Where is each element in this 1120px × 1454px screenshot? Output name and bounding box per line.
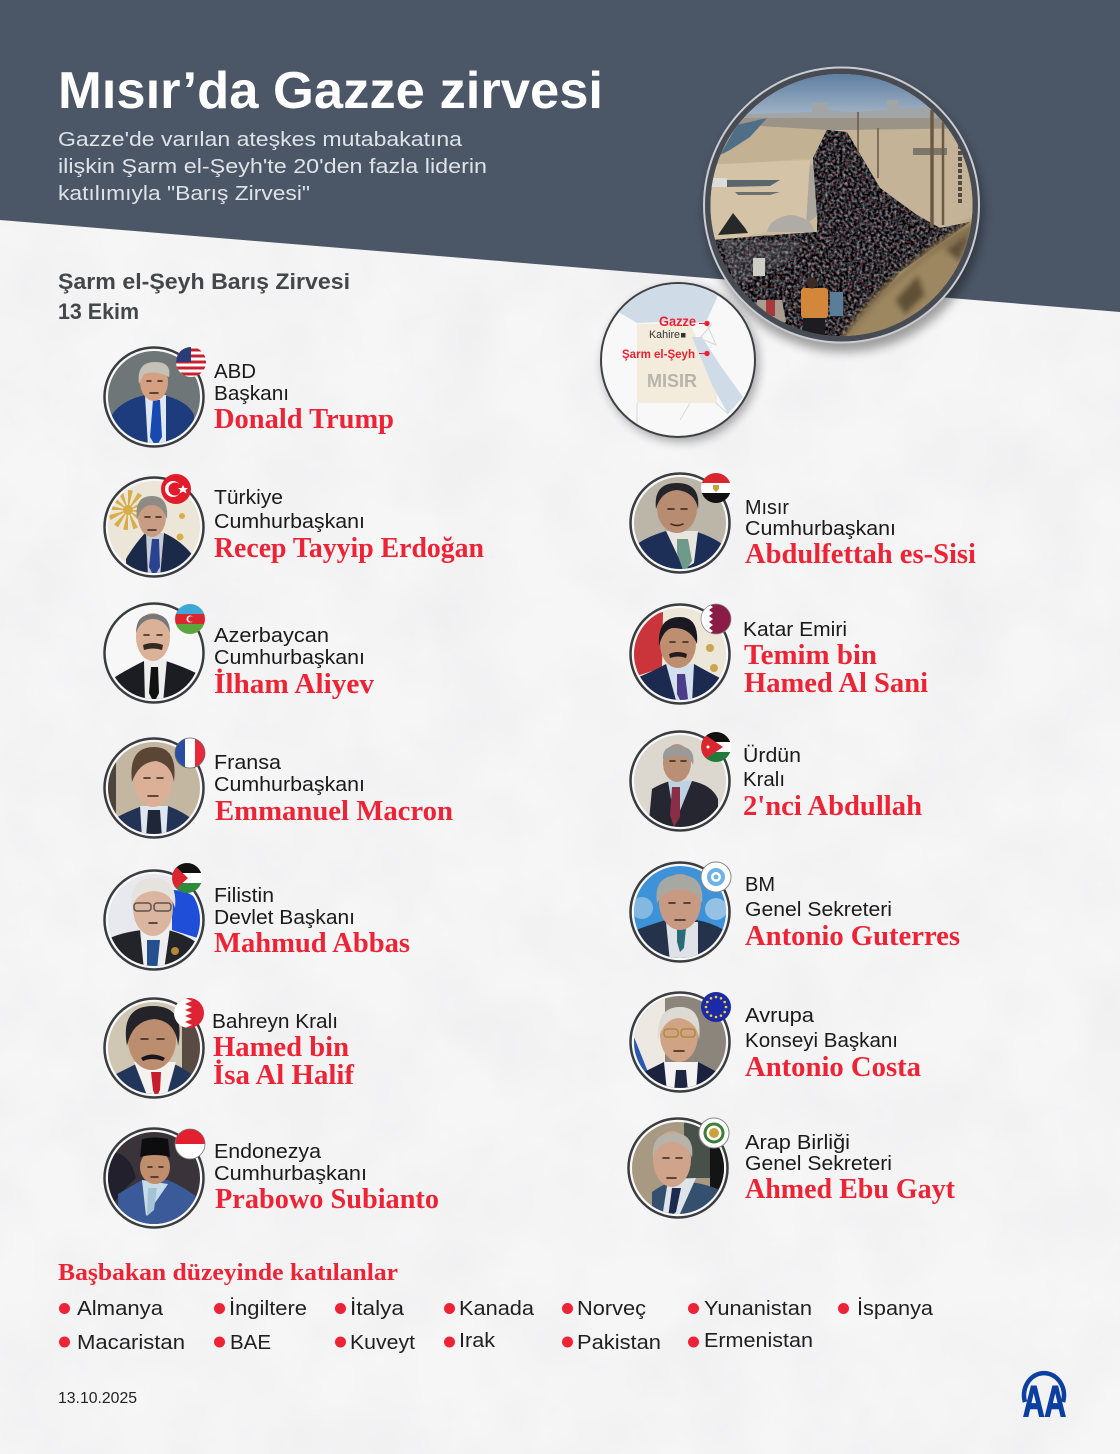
list of countries: Kuveyt: [350, 1332, 415, 1354]
label: Ahmed Ebu Gayt: [745, 1174, 956, 1205]
flag: European Union: [701, 992, 731, 1022]
label: Hamed bin: [213, 1032, 349, 1063]
label: Bahreyn Kralı: [212, 1011, 338, 1033]
portrait: [630, 862, 730, 962]
label: 2'nci Abdullah: [743, 791, 922, 822]
list of countries: İspanya: [857, 1297, 934, 1320]
date: 13.10.2025: [58, 1390, 137, 1407]
label: Arap Birliği: [745, 1132, 850, 1154]
flag: Jordan: [701, 732, 731, 762]
list of countries: İtalya: [350, 1297, 405, 1320]
list of countries: İngiltere: [229, 1297, 307, 1320]
flag: United Nations: [701, 862, 731, 892]
label: Mısır: [745, 497, 789, 519]
label: [743, 619, 928, 699]
leader: Prabowo Subianto: [104, 1128, 439, 1228]
section heading: 13 Ekim: [58, 299, 139, 324]
portrait: [104, 870, 204, 970]
subtitle: katılımıyla "Barış Zirvesi": [58, 183, 310, 205]
label: Hamed Al Sani: [744, 668, 928, 699]
map: Egypt locator: Şarm el-Şeyh: [622, 347, 695, 361]
leader: İlham Aliyev: [104, 603, 374, 703]
label: ABD: [214, 361, 256, 383]
map: Egypt locator: Kahire: [649, 329, 680, 341]
flag: Bahrain: [174, 998, 204, 1028]
list of countries: Pakistan: [577, 1332, 661, 1354]
label: Prabowo Subianto: [215, 1184, 439, 1215]
label: Cumhurbaşkanı: [214, 1163, 367, 1185]
list of countries: Almanya: [77, 1298, 164, 1320]
list of countries: [59, 1297, 934, 1354]
label: [743, 745, 922, 822]
portrait: [630, 604, 730, 704]
label: Cumhurbaşkanı: [214, 647, 365, 669]
portrait: [104, 998, 204, 1098]
label: Kralı: [743, 769, 785, 791]
label: Genel Sekreteri: [745, 899, 892, 921]
label: İlham Aliyev: [214, 669, 374, 700]
flag: Palestine: [172, 863, 202, 893]
leader: Mahmud Abbas: [104, 863, 410, 970]
label: [745, 497, 976, 570]
label: [214, 885, 410, 959]
leader: 2'nci Abdullah: [630, 731, 922, 831]
label: [745, 1132, 956, 1205]
list of countries: Irak: [459, 1330, 496, 1352]
label: Başkanı: [214, 383, 289, 405]
flag: Türkiye: [161, 474, 191, 504]
leader: Emmanuel Macron: [104, 738, 453, 838]
label: Filistin: [214, 885, 274, 907]
label: Fransa: [214, 752, 282, 774]
label: Cumhurbaşkanı: [214, 511, 365, 533]
leader: Antonio Guterres: [630, 862, 960, 962]
map: Egypt locator: [600, 282, 759, 442]
label: BM: [745, 874, 775, 896]
portrait: [104, 477, 204, 577]
label: [214, 752, 453, 827]
label: [214, 361, 394, 435]
label: [745, 1005, 921, 1083]
title: Mısır’da Gazze zirvesi: [58, 62, 603, 120]
flag: Arab League: [699, 1118, 729, 1148]
label: Recep Tayyip Erdoğan: [214, 533, 484, 564]
label: Azerbaycan: [214, 625, 329, 647]
list of countries: Macaristan: [77, 1332, 185, 1354]
leader: Donald Trump: [104, 347, 394, 447]
photo: crowd on coastal road: [700, 66, 990, 355]
leader: Hamed bin İsa Al Halife: [104, 998, 355, 1098]
flag: France: [175, 738, 205, 768]
label: Ürdün: [743, 745, 801, 767]
list of countries: Kanada: [459, 1298, 535, 1320]
heading: prime-minister level participants: Başbakan düzeyinde katılanlar: [58, 1260, 398, 1286]
label: Devlet Başkanı: [214, 907, 355, 929]
portrait: [630, 473, 730, 573]
leader: Antonio Costa: [630, 992, 921, 1092]
label: [212, 1011, 355, 1091]
label: İsa Al Halif: [213, 1060, 355, 1091]
label: [214, 625, 374, 700]
flag: USA: [176, 347, 206, 377]
portrait: [104, 347, 204, 447]
label: Cumhurbaşkanı: [745, 518, 896, 540]
label: Türkiye: [214, 487, 283, 509]
map: Egypt locator: MISIR: [647, 370, 697, 391]
subtitle: [58, 129, 487, 205]
subtitle: Gazze'de varılan ateşkes mutabakatına: [58, 129, 463, 151]
label: Temim bin: [744, 640, 877, 671]
leader: Abdulfettah es-Sisi: [630, 473, 976, 573]
subtitle: ilişkin Şarm el-Şeyh'te 20'den fazla liderin: [58, 156, 487, 178]
label: Abdulfettah es-Sisi: [745, 539, 976, 570]
list of countries: BAE: [230, 1332, 271, 1354]
section heading: [58, 269, 350, 324]
section heading: Şarm el-Şeyh Barış Zirvesi: [58, 269, 350, 294]
portrait: [104, 738, 204, 838]
label: Antonio Guterres: [745, 921, 960, 952]
label: Konseyi Başkanı: [745, 1030, 898, 1052]
label: Endonezya: [214, 1141, 322, 1163]
portrait: [104, 1128, 204, 1228]
label: Avrupa: [745, 1005, 815, 1027]
list of countries: Yunanistan: [704, 1298, 812, 1320]
label: Antonio Costa: [745, 1052, 921, 1083]
label: [745, 874, 960, 952]
flag: Qatar: [701, 604, 731, 634]
header band: [0, 0, 1120, 312]
label: Cumhurbaşkanı: [214, 774, 365, 796]
label: Genel Sekreteri: [745, 1153, 892, 1175]
leader: Temim bin Hamed Al Sani: [630, 604, 928, 704]
label: [214, 487, 484, 564]
flag: Indonesia: [175, 1129, 205, 1159]
list of countries: Ermenistan: [704, 1330, 813, 1352]
portrait: [630, 992, 730, 1092]
list of countries: Norveç: [577, 1298, 646, 1320]
flag: Egypt: [701, 473, 731, 503]
leader: Recep Tayyip Erdoğan: [104, 474, 484, 577]
portrait: [104, 603, 204, 703]
map: Egypt locator: Gazze: [659, 314, 696, 329]
label: Donald Trump: [214, 404, 394, 435]
label: [214, 1141, 439, 1215]
logo: Anadolu Agency: [1023, 1373, 1066, 1426]
leader: Ahmed Ebu Gayt: [628, 1118, 956, 1218]
portrait: [630, 731, 730, 831]
label: Emmanuel Macron: [215, 796, 453, 827]
label: Mahmud Abbas: [214, 928, 410, 959]
flag: Azerbaijan: [175, 604, 205, 634]
portrait: [628, 1118, 728, 1218]
label: Katar Emiri: [743, 619, 847, 641]
logo: Anadolu Agency: AA: [1023, 1377, 1066, 1426]
